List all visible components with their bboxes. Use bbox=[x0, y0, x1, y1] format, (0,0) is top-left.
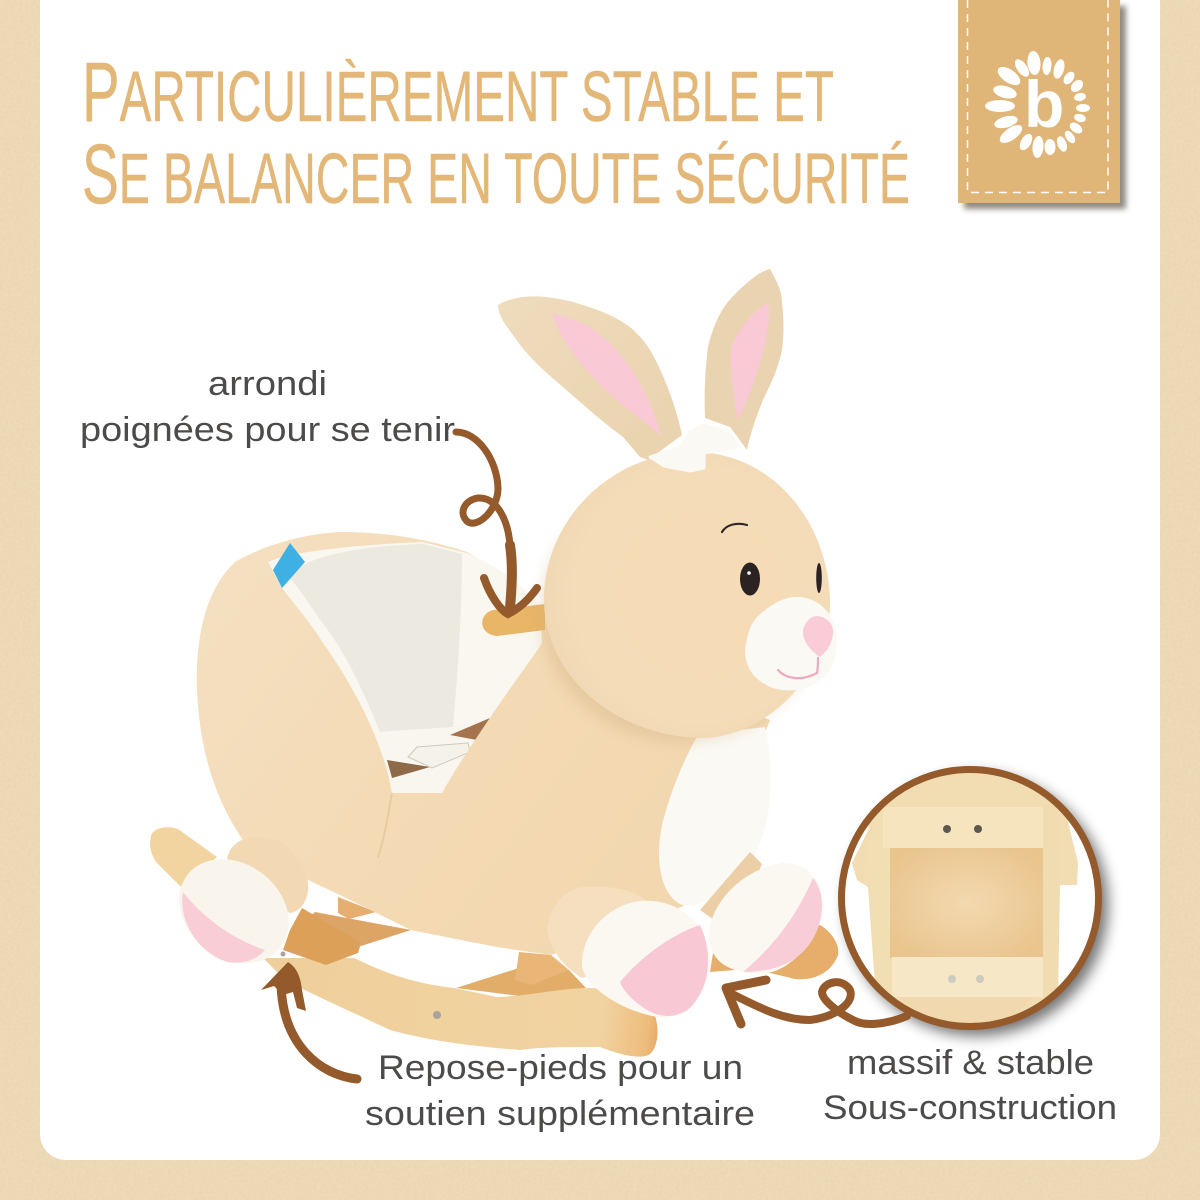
arrow: to handle bbox=[456, 432, 537, 614]
bow bbox=[650, 425, 738, 471]
arrow: to base bbox=[726, 980, 907, 1024]
head shadow on body bbox=[540, 482, 820, 742]
inset: underside detail bbox=[842, 760, 1108, 1036]
right eye bbox=[816, 563, 822, 593]
label: footrest: Repose-pieds pour un bbox=[378, 1049, 743, 1087]
seat inner wall bbox=[290, 544, 462, 732]
right foot bbox=[700, 852, 823, 973]
label: handles line 2: poignées pour se tenir bbox=[80, 411, 455, 449]
torso bbox=[370, 640, 769, 955]
brand tag bbox=[958, 0, 1126, 209]
icon: sun logo bbox=[985, 50, 1090, 158]
icon: sun logo: b bbox=[1024, 67, 1064, 141]
head bbox=[544, 452, 830, 738]
rocking rabbit toy bbox=[150, 269, 838, 1057]
front leg and foot bbox=[547, 887, 710, 1018]
left eye bbox=[740, 562, 760, 596]
seat crease bbox=[378, 793, 392, 858]
back leg and foot bbox=[159, 837, 309, 984]
smile bbox=[778, 658, 818, 678]
label tag bbox=[273, 543, 305, 588]
seat body shell bbox=[197, 532, 770, 955]
safety belt bbox=[387, 718, 490, 778]
left ear bbox=[498, 296, 682, 460]
seat back wall bbox=[268, 542, 542, 793]
label: handles: arrondi bbox=[208, 365, 327, 403]
belly patch bbox=[659, 727, 771, 906]
title: PARTICULIÈREMENT STABLE ET bbox=[82, 45, 834, 139]
seat base bbox=[380, 718, 490, 793]
nose bbox=[803, 616, 833, 657]
right ear bbox=[705, 269, 784, 450]
title bbox=[82, 45, 910, 221]
footrest bbox=[283, 908, 361, 965]
label: base: massif & stable bbox=[847, 1044, 1094, 1082]
arrow: to footrest bbox=[261, 962, 357, 1079]
handle bbox=[482, 604, 545, 636]
wooden rockers bbox=[150, 827, 838, 1057]
eyebrow bbox=[722, 524, 747, 532]
snout bbox=[745, 597, 837, 690]
label: base line 2: Sous-construction bbox=[823, 1089, 1117, 1127]
label: footrest line 2: soutien supplémentaire bbox=[365, 1095, 755, 1133]
